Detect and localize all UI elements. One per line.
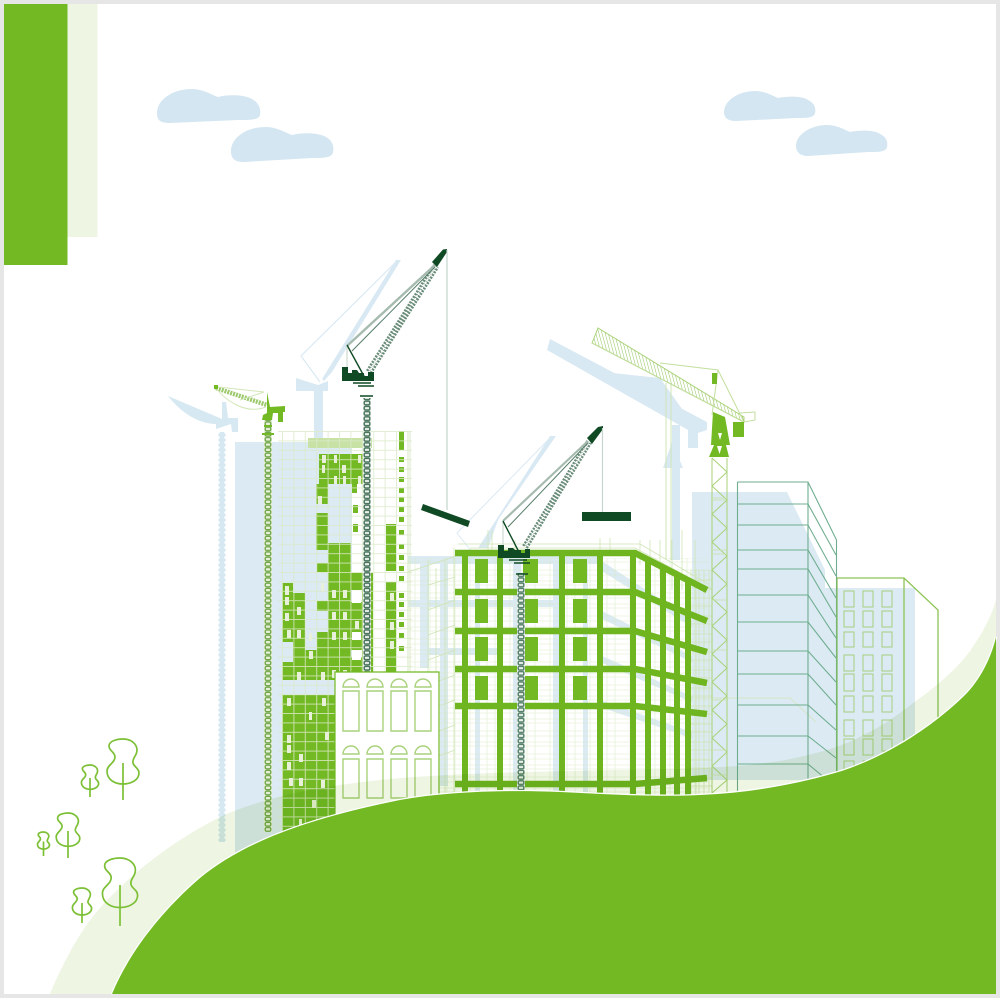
crane: small green left: [214, 385, 285, 832]
clouds: [157, 89, 887, 162]
wireframe low building: [837, 578, 938, 777]
tower pale top bar: [308, 438, 372, 448]
green ground hill: [112, 637, 996, 994]
middle crane cab: [498, 545, 530, 558]
tower cladding panels: [282, 431, 404, 835]
middle crane boom tip: [587, 426, 603, 444]
right crane head: [709, 412, 730, 457]
dark crane cables: [347, 265, 435, 346]
frame beams and columns: [455, 553, 707, 797]
low building windows: [844, 591, 892, 777]
cloud 4: [796, 125, 887, 156]
middle crane cables: [503, 441, 588, 521]
cloud 3: [724, 91, 815, 121]
tree 2: [81, 765, 99, 797]
dark crane mast: [363, 398, 371, 672]
middle crane boom: [525, 442, 589, 547]
main frame building: [455, 553, 707, 797]
right crane mast: [712, 458, 727, 793]
hanging beam right: [582, 512, 631, 521]
tower pale edge strip: [408, 431, 410, 672]
dark crane hoist cable: [446, 250, 448, 510]
ghost crane centre: [296, 260, 401, 441]
pale hill: [50, 600, 996, 994]
tower under construction with green panels: [278, 431, 412, 836]
trees: [38, 739, 139, 926]
pale wireframe behind main frame: [408, 530, 816, 794]
arched building: [335, 672, 439, 815]
tree 3: [56, 813, 80, 858]
cloud 1: [157, 89, 260, 123]
tree 1: [107, 739, 139, 800]
frame windows: [475, 559, 587, 700]
tree 6: [72, 888, 92, 923]
ghost blue cranes and buildings: [168, 260, 915, 857]
ghost crane middle: [457, 436, 556, 552]
dark crane cab: [342, 367, 374, 381]
tall wireframe tower: [738, 482, 836, 800]
tree 4: [38, 832, 50, 856]
ghost crane far left: [168, 396, 238, 842]
tree 5: [102, 858, 138, 926]
dark crane boom: [369, 266, 436, 372]
tower small windows: [285, 455, 394, 827]
ghost crane right: [547, 339, 707, 560]
corner accent: pale green bar: [67, 4, 98, 237]
hanging beam left: [421, 504, 470, 527]
middle crane hoist cable: [602, 428, 604, 512]
crane: dark tower crane on tower: [342, 249, 470, 672]
ghost blue building behind tower: [235, 442, 352, 857]
cloud 2: [231, 127, 333, 162]
tower grid lines: [278, 431, 412, 836]
corner accent: green bar: [4, 4, 68, 265]
crane: tall green right crane: [592, 328, 755, 793]
crane: dark crane on main frame: [498, 426, 631, 792]
dark crane boom tip: [432, 249, 447, 267]
middle crane mast: [517, 573, 525, 792]
ghost blue building right: [692, 492, 915, 780]
arched windows: [343, 679, 431, 798]
right crane ties: [660, 363, 743, 420]
ghost blue frame behind main frame: [408, 556, 700, 796]
right crane jib: [592, 328, 744, 422]
